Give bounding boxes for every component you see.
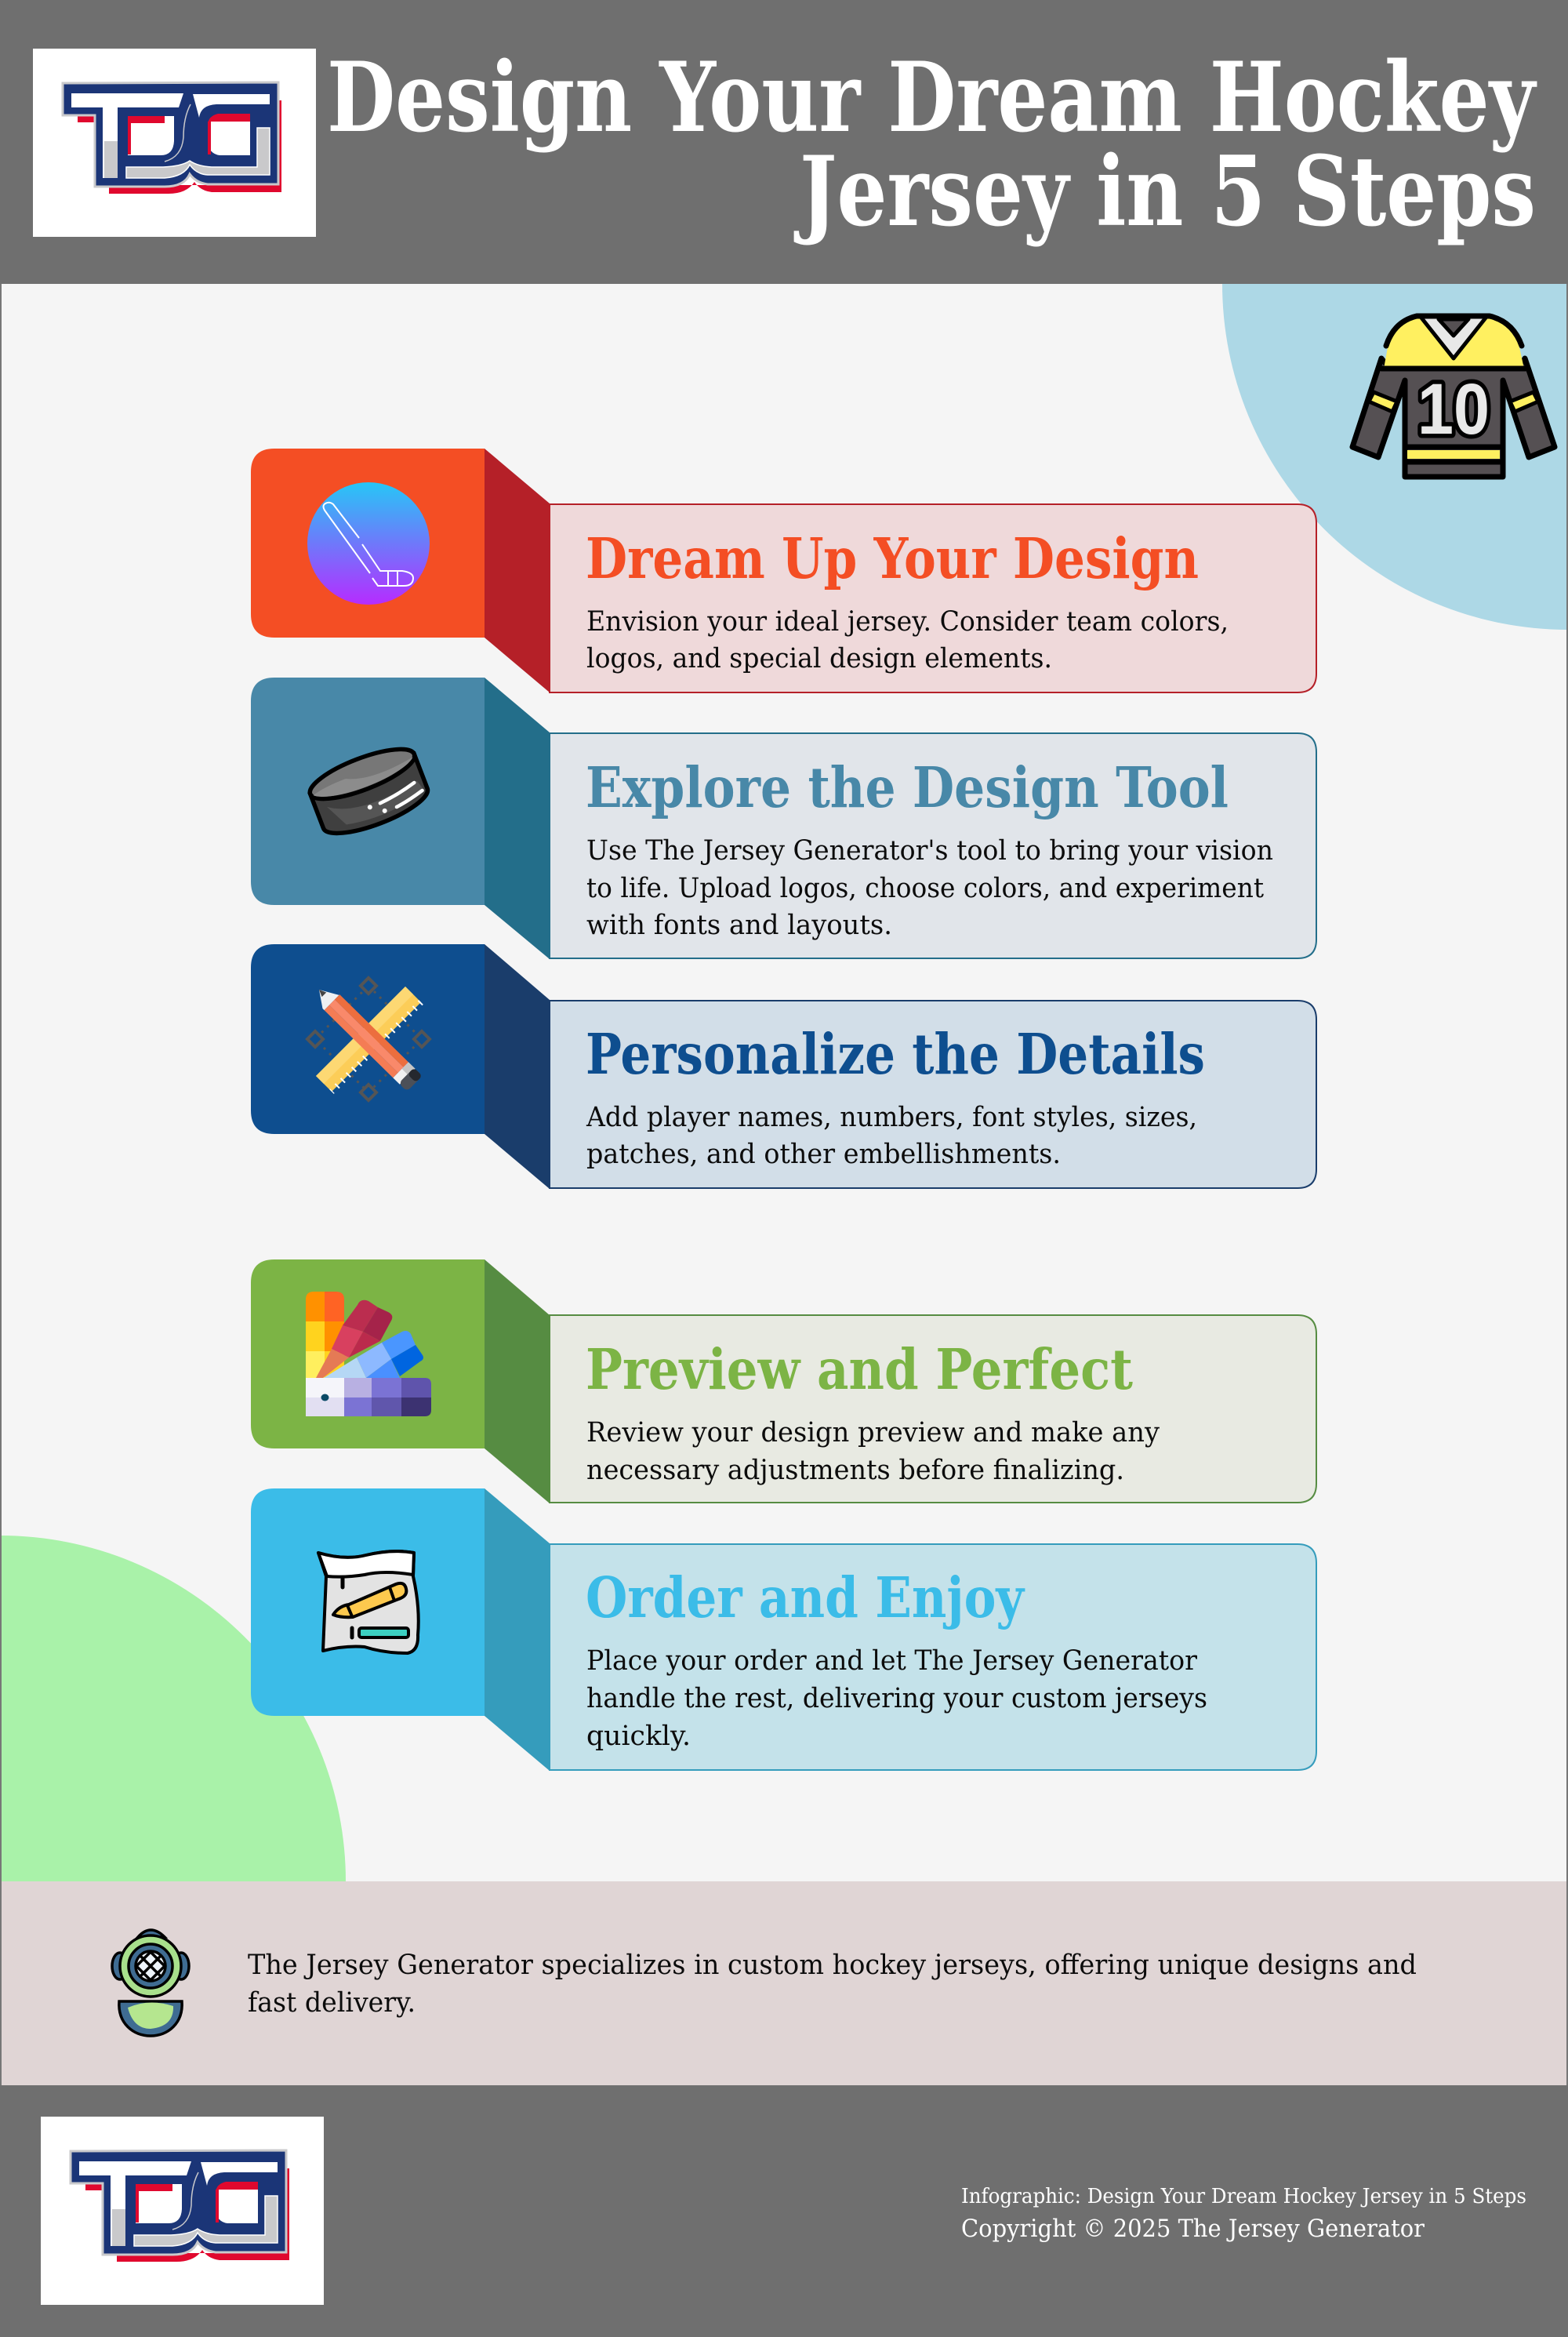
description: quickly. <box>586 1721 691 1752</box>
step 3 card <box>550 1001 1316 1188</box>
icon: diving helmet <box>112 1930 189 2036</box>
step 5 card <box>550 1544 1316 1770</box>
info band <box>0 1881 1568 2085</box>
step 1 fold <box>485 449 550 692</box>
heading: Preview and Perfect <box>586 1336 1133 1402</box>
step 2 card <box>550 733 1316 958</box>
step 5 panel: Order and Enjoy <box>251 1488 1316 1771</box>
background circle: light green bottom left <box>0 1536 346 2227</box>
description <box>586 606 1229 674</box>
step 1 card <box>550 504 1316 692</box>
band text: fast delivery. <box>248 1987 416 2019</box>
description <box>586 1417 1160 1486</box>
logo: header <box>33 49 316 237</box>
description: Place your order and let The Jersey Generator <box>586 1645 1197 1677</box>
band text: The Jersey Generator specializes in custom hockey jerseys, offering unique designs and <box>248 1950 1417 1981</box>
icon: pencil and ruler <box>307 978 430 1100</box>
description <box>586 835 1273 941</box>
description: Envision your ideal jersey. Consider team colors, <box>586 606 1229 638</box>
step 5 fold <box>485 1488 550 1771</box>
description: patches, and other embellishments. <box>586 1139 1061 1170</box>
icon: design sheet with pencil <box>318 1551 419 1653</box>
description: handle the rest, delivering your custom jerseys <box>586 1683 1207 1714</box>
step 3 tile <box>251 944 485 1134</box>
footer text: Copyright © 2025 The Jersey Generator <box>961 2215 1425 2243</box>
description: logos, and special design elements. <box>586 643 1052 674</box>
description <box>586 1102 1197 1170</box>
footer text <box>961 2185 1526 2243</box>
heading: Dream Up Your Design <box>586 525 1199 591</box>
step 5 tile <box>251 1488 485 1716</box>
step 4 panel: Preview and Perfect <box>251 1259 1316 1503</box>
footer text: Infographic: Design Your Dream Hockey Jersey in 5 Steps <box>961 2185 1526 2208</box>
step 4 card <box>550 1315 1316 1503</box>
header band <box>0 0 1568 284</box>
step 1 panel: Dream Up Your Design <box>251 449 1316 692</box>
icon: hockey jersey number 10 <box>1352 316 1555 477</box>
heading: Explore the Design Tool <box>586 754 1229 820</box>
step 4 tile <box>251 1259 485 1448</box>
icon: hockey stick <box>307 482 430 605</box>
title <box>327 42 1537 249</box>
description: Use The Jersey Generator's tool to bring your vision <box>586 835 1273 867</box>
description: Review your design preview and make any <box>586 1417 1160 1448</box>
footer band <box>0 2085 1568 2337</box>
description <box>586 1645 1207 1752</box>
description: Add player names, numbers, font styles, sizes, <box>586 1102 1197 1133</box>
step 2 panel: Explore the Design Tool <box>251 678 1316 959</box>
step 3 panel: Personalize the Details <box>251 944 1316 1189</box>
heading: Order and Enjoy <box>586 1565 1025 1630</box>
step 2 fold <box>485 678 550 959</box>
step 2 tile <box>251 678 485 905</box>
heading: Personalize the Details <box>586 1021 1205 1087</box>
icon: colour swatch fan <box>306 1292 431 1416</box>
icon: hockey jersey number 10: 10 <box>1417 369 1490 449</box>
band text <box>248 1950 1417 2019</box>
step 3 fold <box>485 944 550 1189</box>
description: necessary adjustments before finalizing. <box>586 1455 1124 1486</box>
description: to life. Upload logos, choose colors, and experiment <box>586 873 1264 904</box>
step 1 tile <box>251 449 485 638</box>
logo: footer <box>41 2117 324 2305</box>
icon: hockey puck <box>305 740 433 843</box>
background circle: light blue top right <box>1222 0 1568 630</box>
description: with fonts and layouts. <box>586 910 892 941</box>
step 4 fold <box>485 1259 550 1503</box>
